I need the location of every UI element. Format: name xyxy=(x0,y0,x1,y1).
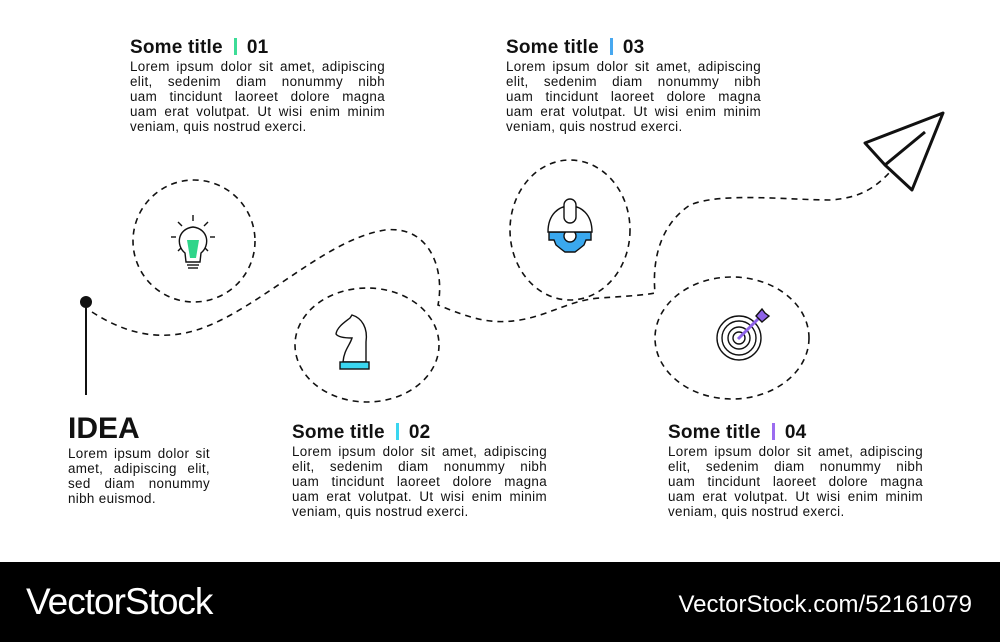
block idea: amet, adipiscing elit, xyxy=(68,461,210,476)
icon: target xyxy=(717,309,769,360)
block 02: veniam, quis nostrud exerci. xyxy=(292,504,469,519)
icon: paper plane xyxy=(865,113,943,190)
block 02: uam tincidunt laoreet dolore magna xyxy=(292,474,547,489)
block 03: elit, sedenim diam nonummy nibh xyxy=(506,74,761,89)
block 02: uam erat volutpat. Ut wisi enim minim xyxy=(292,489,547,504)
block 01 xyxy=(130,37,385,134)
icon: helmet gear xyxy=(548,199,592,252)
block 01: Lorem ipsum dolor sit amet, adipiscing xyxy=(130,59,385,74)
icon: chess knight xyxy=(336,315,369,369)
footer bar: VectorStock xyxy=(26,581,212,622)
block 03: uam tincidunt laoreet dolore magna xyxy=(506,89,761,104)
block 04: veniam, quis nostrud exerci. xyxy=(668,504,845,519)
block 01: Some title 01 xyxy=(130,37,268,58)
block 03: veniam, quis nostrud exerci. xyxy=(506,119,683,134)
block 04: Some title 04 xyxy=(668,422,806,443)
block idea: IDEA xyxy=(68,412,140,445)
block 03: Lorem ipsum dolor sit amet, adipiscing xyxy=(506,59,761,74)
block 02 xyxy=(292,422,547,519)
block 03: Some title 03 xyxy=(506,37,644,58)
circle: chess xyxy=(295,288,439,402)
footer bar xyxy=(0,562,1000,642)
block 03 xyxy=(506,37,761,134)
start pin xyxy=(80,296,92,395)
block 01: uam tincidunt laoreet dolore magna xyxy=(130,89,385,104)
block idea: sed diam nonummy xyxy=(68,476,210,491)
block 04: elit, sedenim diam nonummy nibh xyxy=(668,459,923,474)
circle: bulb xyxy=(133,180,255,302)
block idea: Lorem ipsum dolor sit xyxy=(68,446,210,461)
block idea xyxy=(68,412,210,506)
circle: hat xyxy=(510,160,630,300)
block 03: uam erat volutpat. Ut wisi enim minim xyxy=(506,104,761,119)
block 01: uam erat volutpat. Ut wisi enim minim xyxy=(130,104,385,119)
block 02: Some title 02 xyxy=(292,422,430,443)
block idea: nibh euismod. xyxy=(68,491,156,506)
block 04: uam erat volutpat. Ut wisi enim minim xyxy=(668,489,923,504)
block 04: uam tincidunt laoreet dolore magna xyxy=(668,474,923,489)
dashed route xyxy=(92,172,890,335)
circle: target xyxy=(655,277,809,399)
footer bar: VectorStock.com/52161079 xyxy=(678,591,972,618)
block 01: veniam, quis nostrud exerci. xyxy=(130,119,307,134)
block 01: elit, sedenim diam nonummy nibh xyxy=(130,74,385,89)
block 02: Lorem ipsum dolor sit amet, adipiscing xyxy=(292,444,547,459)
block 02: elit, sedenim diam nonummy nibh xyxy=(292,459,547,474)
block 04 xyxy=(668,422,923,519)
icon: bulb xyxy=(171,215,215,268)
block 04: Lorem ipsum dolor sit amet, adipiscing xyxy=(668,444,923,459)
